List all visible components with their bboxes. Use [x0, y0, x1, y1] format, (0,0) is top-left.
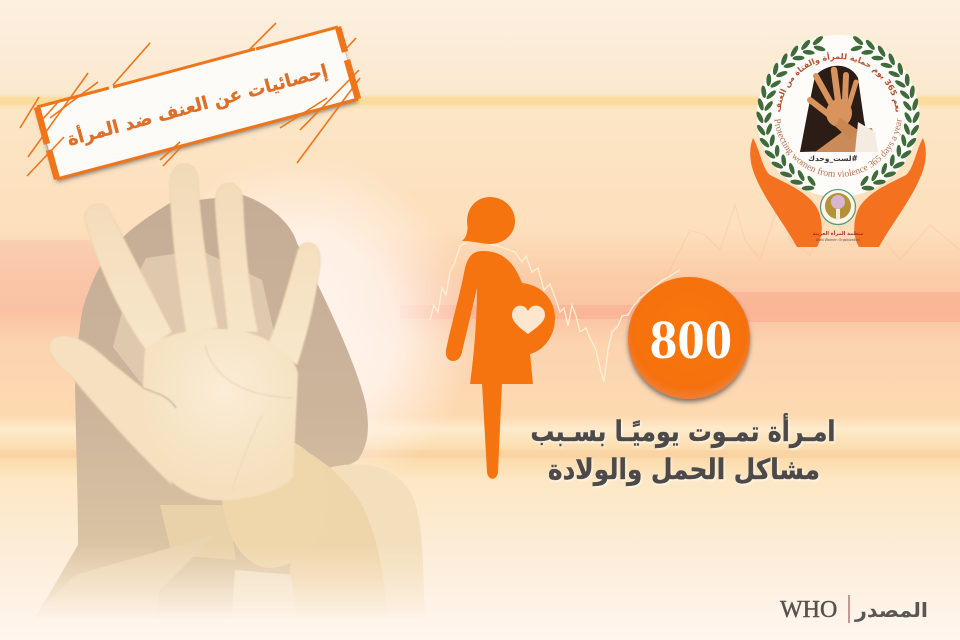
source credit: [780, 595, 928, 623]
source name: WHO: [780, 597, 837, 623]
body: [446, 251, 555, 384]
source label: المصدر: [854, 598, 928, 622]
banner hatch lines: [20, 23, 360, 176]
logo emblem: [812, 190, 864, 242]
logo wreath right: [849, 34, 922, 196]
logo wreath left: [754, 34, 827, 196]
banner title: إحصائيات عن العنف ضد المرأة: [65, 59, 330, 151]
banner frame: [37, 27, 358, 179]
hair: [40, 195, 368, 610]
palm: [143, 329, 298, 500]
logo left orange hand: [750, 138, 822, 247]
sleeve: [330, 464, 424, 606]
stat number: 800: [650, 309, 732, 370]
icon: pregnant woman: [446, 197, 555, 479]
second line: مشاكل الحمل والولادة: [548, 453, 820, 486]
banner: statistics on violence against women: [20, 23, 360, 179]
logo hashtag: #لست_وحدك: [808, 154, 858, 163]
face: [113, 253, 274, 386]
logo emblem: منظمة المرأة العربية: [812, 230, 864, 237]
neck and chest: [160, 505, 236, 560]
logo curved english text: Protecting women from violence 365 days a year: [774, 118, 902, 177]
logo curved arabic text: نعم 365 يوم حماية للمرأة والفتاة من العنف: [776, 52, 900, 112]
ecg line: [430, 240, 680, 382]
leg: [482, 383, 502, 479]
fingers: [85, 204, 172, 350]
first line: امـرأة تمـوت يوميًـا بسـبب: [530, 413, 836, 448]
thumb: [49, 336, 172, 485]
head: [462, 197, 515, 244]
logo disc: [757, 35, 919, 197]
stat circle: 800: [628, 277, 750, 399]
heart: [512, 306, 545, 334]
logo emblem: Arab Women Organization: [816, 238, 860, 242]
wrist: [222, 443, 308, 568]
logo photo: [800, 66, 878, 152]
banner card: [37, 27, 358, 179]
hand: [49, 164, 320, 500]
forearm: [290, 452, 384, 596]
photo: woman raising her hand: [40, 163, 424, 610]
stat text: [530, 413, 836, 486]
logo right orange hand: [854, 138, 926, 247]
logo: protecting women: [750, 35, 926, 247]
